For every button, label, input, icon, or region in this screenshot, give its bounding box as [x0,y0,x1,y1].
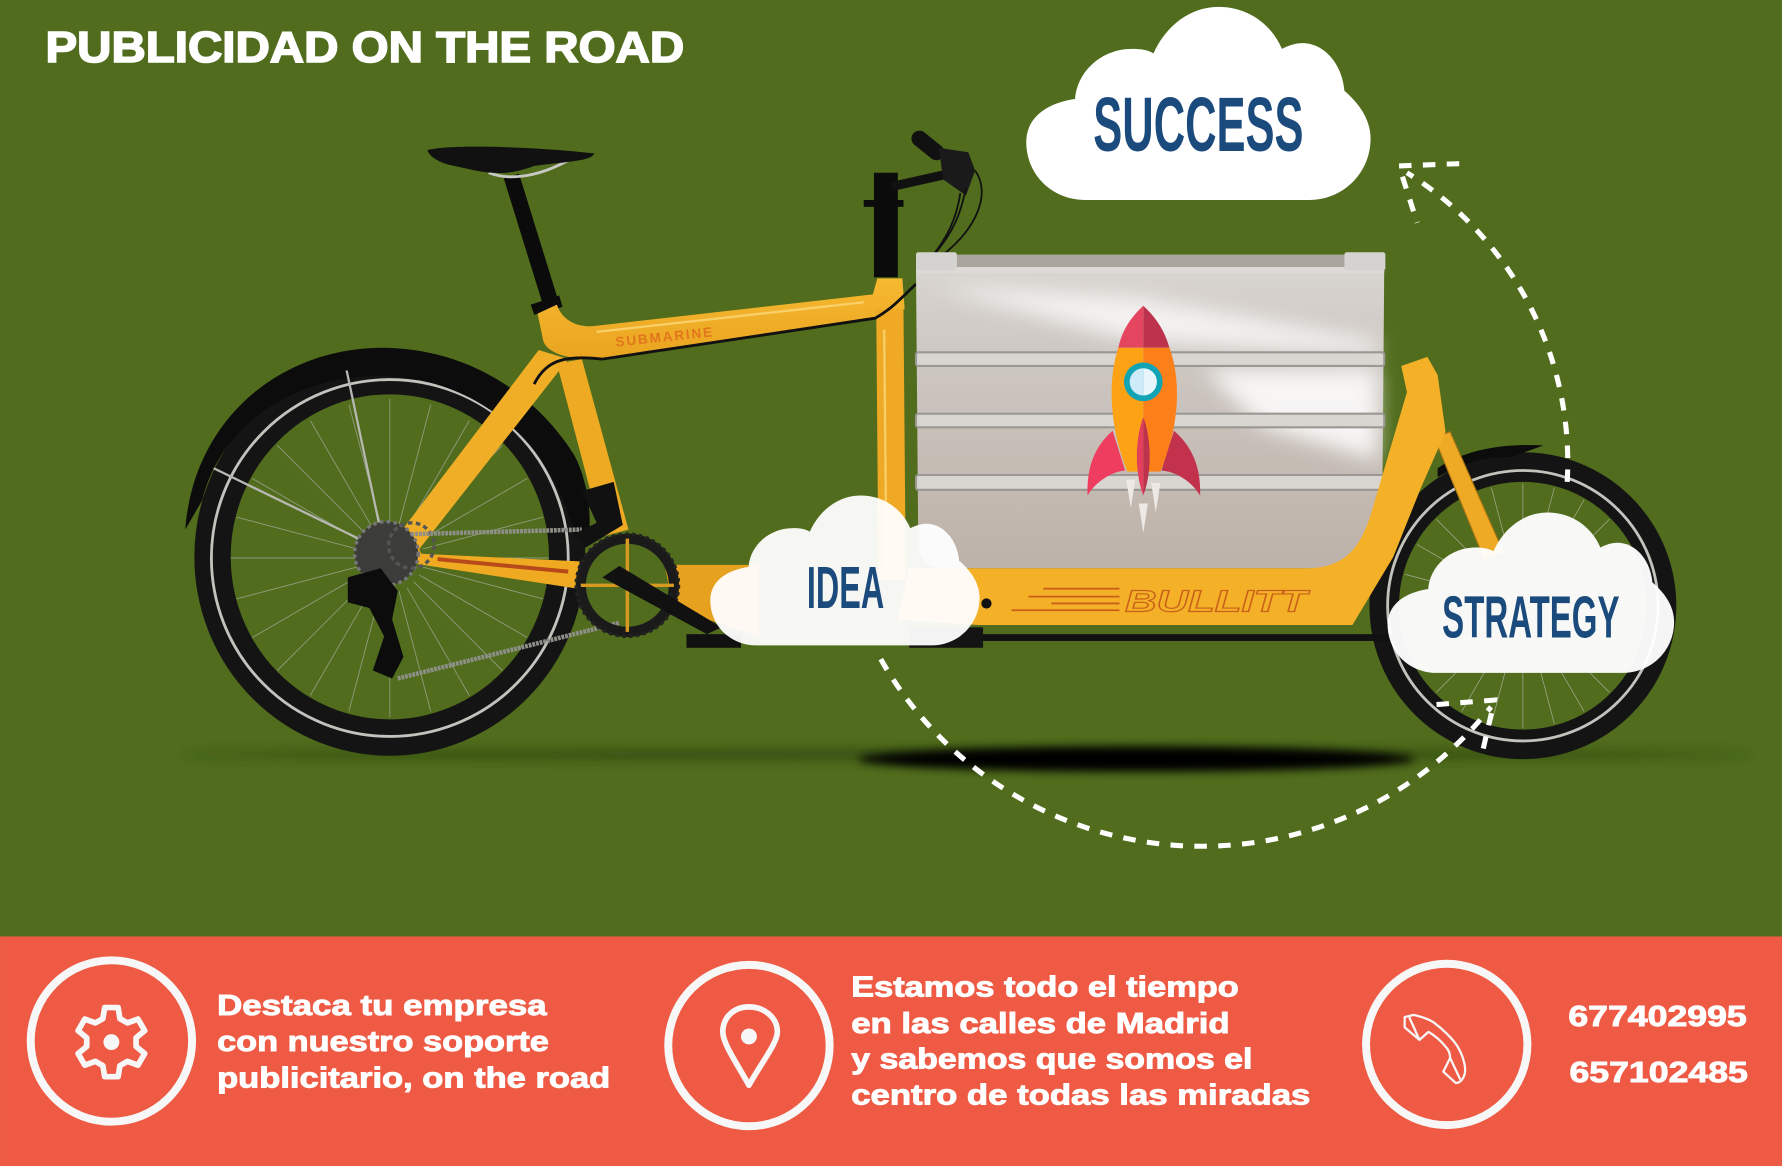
text: destaca [217,990,610,1095]
cloud: strategy: STRATEGY [1442,585,1619,651]
text: estamos: Estamos todo el tiempo [851,972,1239,1004]
chain [398,530,619,678]
ground shadow [182,747,1750,772]
text: estamos [851,972,1310,1112]
icon: gear [31,960,192,1122]
seat post and saddle [427,147,594,315]
brake stripe on chainstay [438,559,568,572]
icon: phone [1366,964,1527,1125]
cloud: idea: IDEA [807,555,884,621]
front fork [1434,432,1504,559]
text: estamos: centro de todas las miradas [851,1080,1310,1112]
cargo frame [898,357,1446,625]
aluminium cargo box [916,252,1385,568]
lower rail and clamp [909,627,1398,648]
title: PUBLICIDAD ON THE ROAD [45,24,684,72]
rear wheel [211,376,568,738]
cloud: idea [710,495,980,645]
frame cable [534,284,916,384]
rocket [1088,306,1200,533]
SUBMARINE label: SUBMARINE [615,324,715,350]
text: phone numbers: 657102485 [1569,1057,1748,1089]
text: destaca: Destaca tu empresa [217,990,547,1022]
icon: map pin [668,965,830,1126]
cargo bike [185,139,1662,744]
text: estamos: en las calles de Madrid [851,1008,1230,1040]
text: estamos: y sabemos que somos el [851,1043,1252,1075]
cloud: success [1026,7,1371,200]
text: destaca: con nuestro soporte [217,1026,549,1058]
rear fender [185,348,590,536]
BULLITT logo: BULLITT [1125,583,1310,618]
text: phone numbers [1568,1001,1748,1089]
front wheel [1384,445,1662,744]
cassette and rear derailleur [348,522,434,678]
cloud: strategy [1388,513,1674,673]
dashed cycle arrows [881,164,1568,846]
bottom band [0,936,1782,1166]
fender stays [214,370,384,548]
frame highlights [597,302,886,568]
frame bolt [981,598,992,609]
BULLITT logo [1011,583,1310,618]
text: destaca: publicitario, on the road [217,1063,610,1095]
cloud: success: SUCCESS [1093,82,1304,168]
text: phone numbers: 677402995 [1568,1001,1747,1033]
frame tubes [392,278,906,636]
chainring and crank [576,534,741,648]
front derailleur [574,482,623,548]
handlebar and stem [864,139,982,277]
